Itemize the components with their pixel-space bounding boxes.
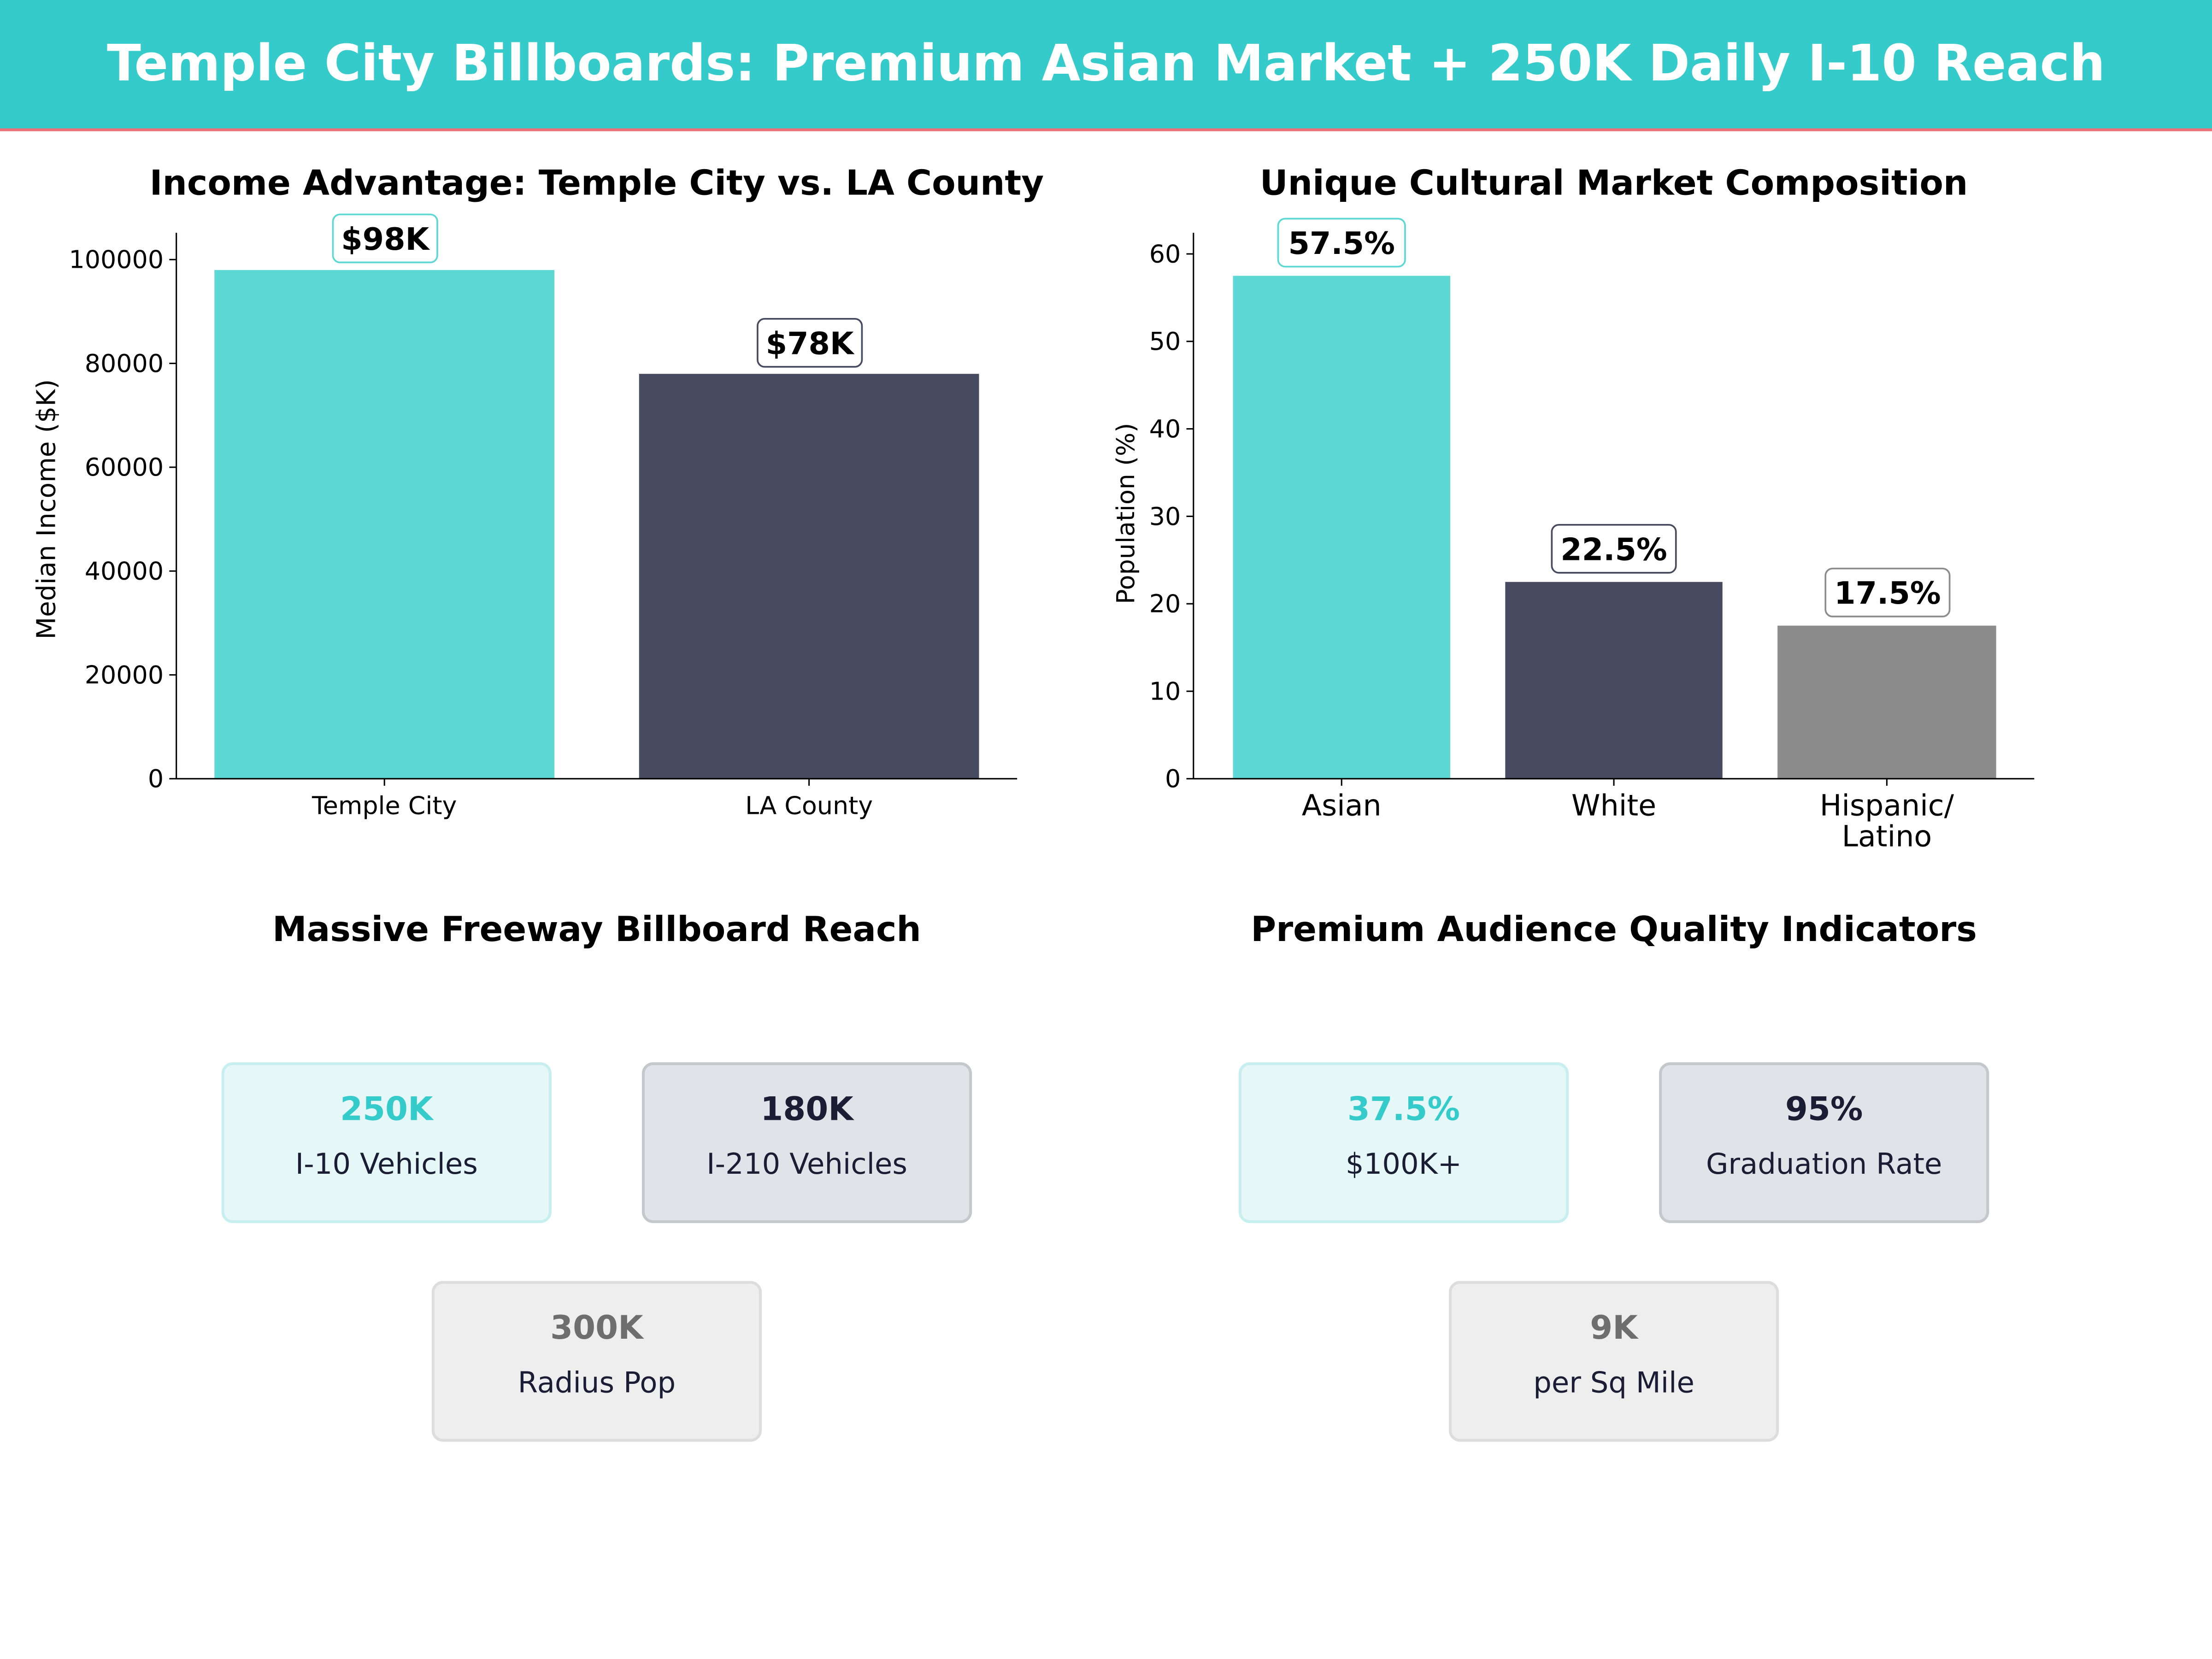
card: 95%: Graduation Rate [1706,1147,1942,1181]
bar chart: income: 20000 [85,660,164,689]
label: 22.5%: 22.5% [1560,531,1667,567]
card: 37.5% [1240,1064,1567,1222]
label: $98K [333,214,437,262]
heading: audience quality: Premium Audience Quality Indicators [1251,909,1977,949]
panel: audience quality [1240,909,1988,1441]
bar chart: income: 0 [148,764,164,793]
bar chart: composition [1111,233,2034,853]
card: 180K I-210: 180K [760,1090,854,1128]
bar chart: composition: 20 [1149,589,1181,618]
label: 57.5% [1278,218,1405,267]
card: 250K I-10: 250K [340,1090,434,1128]
label: 22.5% [1552,525,1676,573]
card: 95% [1660,1064,1988,1222]
header banner [0,0,2212,131]
card: 180K I-210: I-210 Vehicles [706,1147,907,1181]
bar chart: income: 40000 [85,557,164,586]
bar chart: composition: 10 [1149,677,1181,706]
label: 17.5%: 17.5% [1834,575,1941,611]
card: 95%: 95% [1785,1090,1863,1128]
panel: freeway reach [223,909,971,1441]
card: 250K I-10 [223,1064,550,1222]
bar chart: income: LA County [745,791,873,820]
bar chart: composition: 40 [1149,414,1181,443]
card: 180K I-210 [643,1064,971,1222]
panel: cultural composition chart [1111,162,2034,853]
bar chart: income [31,233,1017,820]
label: 57.5%: 57.5% [1288,225,1395,261]
bar chart: income: 100000 [69,245,164,274]
card: 250K I-10: I-10 Vehicles [295,1147,478,1181]
chart title: income: Income Advantage: Temple City vs. LA County [150,162,1044,203]
bar chart: composition: Asian [1302,788,1382,822]
bar chart: composition: 50 [1149,327,1181,356]
bar chart: composition: White [1571,788,1656,822]
card: 9K [1450,1282,1777,1441]
bar chart: composition: Latino [1842,819,1932,853]
card: 37.5%: 37.5% [1347,1090,1460,1128]
bar chart: income: Median Income ($K) [31,379,61,639]
bar chart: composition: Population (%) [1111,423,1140,604]
label: $78K: $78K [766,325,855,361]
card: 37.5%: $100K+ [1346,1147,1462,1181]
card: 300K radius: Radius Pop [518,1365,676,1399]
label: $78K [758,319,862,367]
panel: income chart [31,162,1044,820]
card: 9K: 9K [1590,1309,1639,1347]
bar chart: income: 60000 [85,453,164,482]
bar chart: composition: 30 [1149,502,1181,531]
label: $98K: $98K [341,221,430,257]
card: 300K radius: 300K [550,1309,644,1347]
bar chart: income: 80000 [85,349,164,378]
label: 17.5% [1825,569,1950,617]
bar chart: composition: 60 [1149,239,1181,268]
chart title: composition: Unique Cultural Market Composition [1260,162,1968,203]
header banner: Temple City Billboards: Premium Asian Market + 250K Daily I-10 Reach [107,34,2105,92]
bar chart: income: Temple City [312,791,457,820]
card: 300K radius [433,1282,760,1441]
card: 9K: per Sq Mile [1533,1365,1694,1399]
heading: freeway reach: Massive Freeway Billboard Reach [272,909,921,949]
bar chart: composition: Hispanic/ [1820,788,1954,822]
bar chart: composition: 0 [1165,764,1181,793]
